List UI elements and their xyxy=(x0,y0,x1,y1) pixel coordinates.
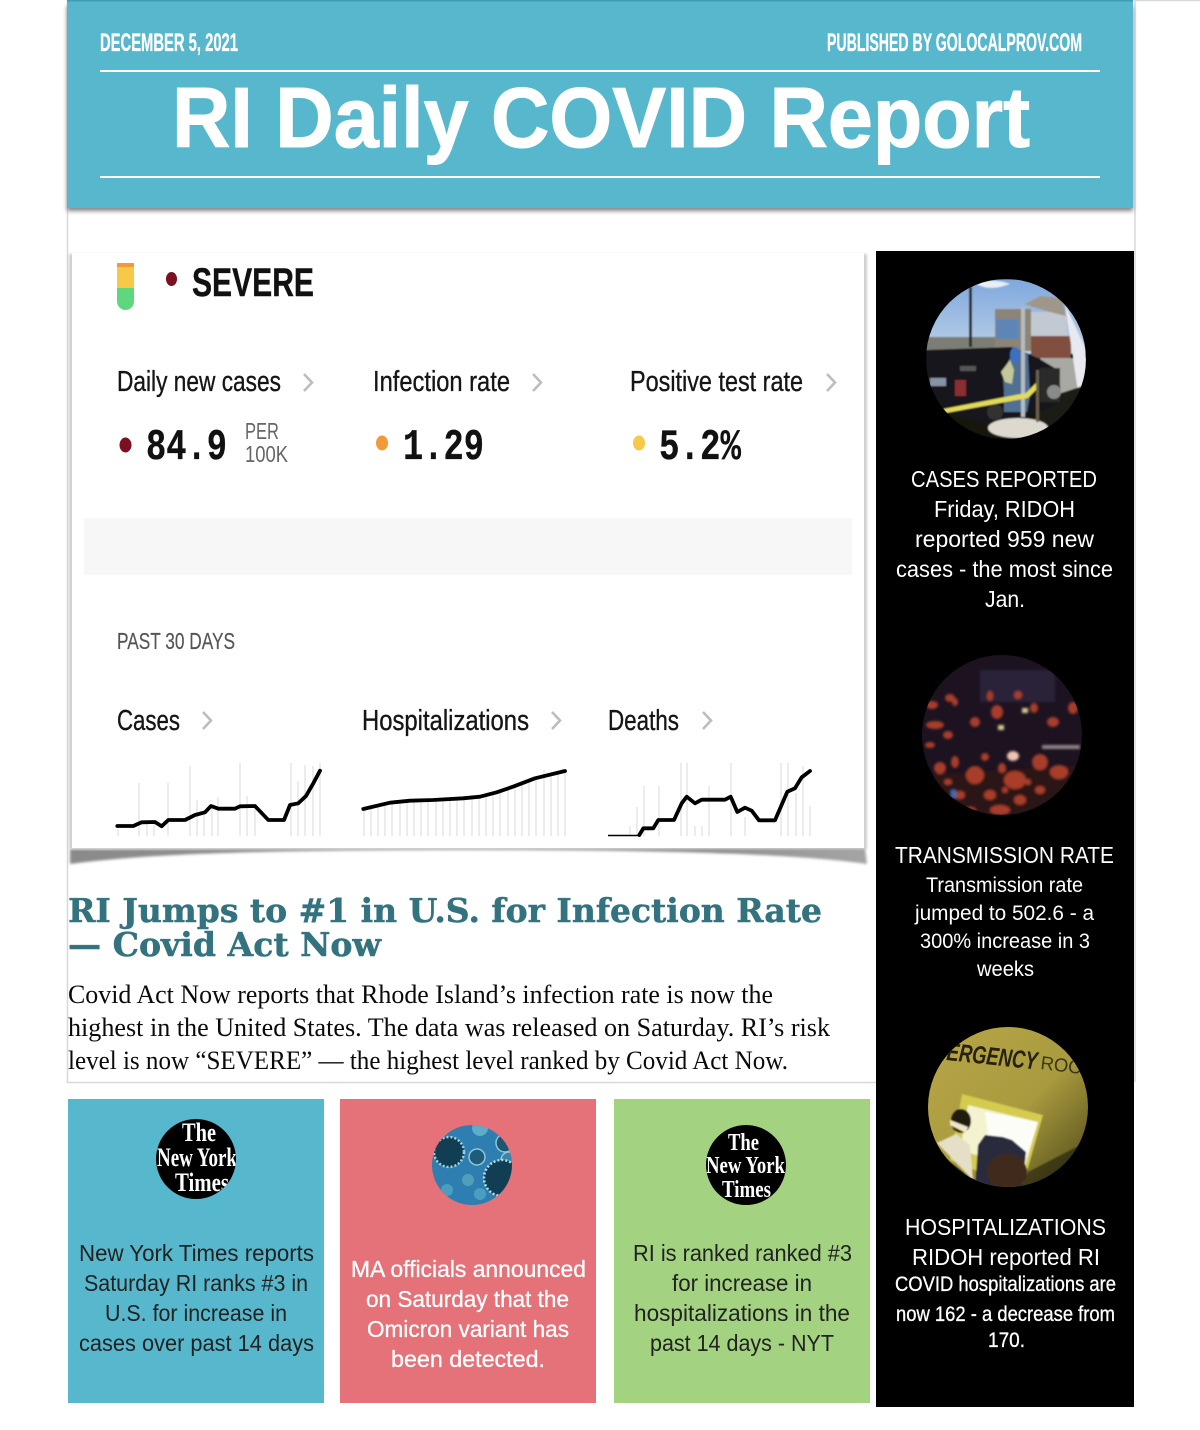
text: transmission rate: jumped to 502.6 - a xyxy=(914,902,1094,925)
photo: emergency room xyxy=(928,1027,1090,1190)
severe status: SEVERE xyxy=(192,261,314,305)
metric: daily new cases: 100K xyxy=(245,441,289,467)
title: RI Daily COVID Report xyxy=(172,71,1030,166)
metric: daily new cases xyxy=(117,366,312,473)
chart: hospitalizations xyxy=(362,705,565,836)
photo: crowd xyxy=(922,655,1082,815)
chart: deaths xyxy=(608,705,810,836)
card: hospitalizations ranking xyxy=(614,1099,870,1403)
text: transmission rate: TRANSMISSION RATE xyxy=(895,842,1114,868)
card text xyxy=(633,1240,852,1356)
card text: Saturday RI ranks #3 in xyxy=(84,1270,308,1296)
text: hospitalizations: HOSPITALIZATIONS xyxy=(905,1214,1106,1240)
metric: daily new cases: Daily new cases xyxy=(117,366,281,398)
grey band xyxy=(84,518,852,575)
risk gauge icon xyxy=(117,263,134,310)
metric: infection rate: 1.29 xyxy=(403,423,484,473)
metric: positive test rate: Positive test rate xyxy=(630,366,803,398)
text: hospitalizations xyxy=(895,1214,1116,1352)
article heading: RI Jumps to #1 in U.S. for Infection Rate xyxy=(68,891,822,930)
icon: NYT logo xyxy=(706,1125,786,1205)
panel: risk level screenshot xyxy=(69,253,867,864)
text: hospitalizations: now 162 - a decrease from xyxy=(896,1303,1115,1326)
card text: past 14 days - NYT xyxy=(650,1330,834,1356)
text: cases reported: Friday, RIDOH xyxy=(934,496,1075,522)
icon: NYT logo: Times xyxy=(722,1177,771,1203)
metric: infection rate: Infection rate xyxy=(373,366,510,398)
card text: MA officials announced xyxy=(351,1256,586,1282)
icon: NYT logo: New York xyxy=(157,1143,237,1172)
card: New York Times cases xyxy=(68,1099,324,1403)
card text xyxy=(351,1256,586,1372)
chart: cases: Cases xyxy=(117,705,180,737)
card text: New York Times reports xyxy=(79,1240,314,1266)
photo: emergency room: ERGENCY xyxy=(945,1038,1040,1076)
article body text xyxy=(68,980,830,1075)
page frame xyxy=(68,0,1200,1082)
chart: cases xyxy=(117,705,320,836)
text: hospitalizations: RIDOH reported RI xyxy=(912,1244,1100,1270)
card text: Omicron variant has xyxy=(367,1316,569,1342)
photo: emergency room: ROO xyxy=(1039,1053,1084,1079)
card text: RI is ranked ranked #3 xyxy=(633,1240,852,1266)
card text xyxy=(79,1240,314,1356)
article body text: Covid Act Now reports that Rhode Island’s infection rate is now the xyxy=(68,980,773,1009)
chart: hospitalizations: Hospitalizations xyxy=(362,705,529,737)
article heading xyxy=(68,891,822,964)
icon: NYT logo: The xyxy=(182,1118,216,1147)
icon: NYT logo: Times xyxy=(175,1168,229,1197)
icon: NYT logo: New York xyxy=(706,1153,786,1179)
card text: hospitalizations in the xyxy=(634,1300,850,1326)
card text: for increase in xyxy=(672,1270,812,1296)
article body text: level is now “SEVERE” — the highest level ranked by Covid Act Now. xyxy=(68,1046,788,1075)
article body text: highest in the United States. The data was released on Saturday. RI’s risk xyxy=(68,1013,830,1042)
metric: positive test rate: 5.2% xyxy=(659,423,741,473)
metric: positive test rate xyxy=(630,366,835,473)
text: transmission rate: 300% increase in 3 xyxy=(920,930,1090,953)
text: cases reported: Jan. xyxy=(985,586,1025,612)
card: Omicron variant xyxy=(340,1099,596,1403)
icon: NYT logo xyxy=(156,1118,237,1199)
header banner xyxy=(67,0,1133,211)
card text: U.S. for increase in xyxy=(105,1300,287,1326)
card text: been detected. xyxy=(391,1346,545,1372)
icon: virus image xyxy=(432,1125,512,1205)
icon: NYT logo: The xyxy=(728,1130,759,1156)
panel: black sidebar xyxy=(876,251,1134,1407)
severe status xyxy=(166,261,314,305)
past 30 days label: PAST 30 DAYS xyxy=(117,628,235,654)
date: DECEMBER 5, 2021 xyxy=(100,29,238,57)
text: hospitalizations: 170. xyxy=(988,1329,1025,1352)
photo: testing site xyxy=(926,279,1090,440)
text: cases reported: cases - the most since xyxy=(896,556,1113,582)
metric: daily new cases: 84.9 xyxy=(146,423,227,473)
metric: daily new cases: PER xyxy=(245,418,279,444)
text: cases reported xyxy=(896,466,1113,612)
text: hospitalizations: COVID hospitalizations are xyxy=(895,1273,1116,1296)
text: transmission rate: weeks xyxy=(976,958,1034,981)
text: cases reported: reported 959 new xyxy=(915,526,1094,552)
text: transmission rate: Transmission rate xyxy=(926,874,1083,897)
text: transmission rate xyxy=(895,842,1114,981)
card text: on Saturday that the xyxy=(366,1286,569,1312)
chart: deaths: Deaths xyxy=(608,705,679,737)
metric: infection rate xyxy=(373,366,541,473)
text: cases reported: CASES REPORTED xyxy=(911,466,1097,492)
card text: cases over past 14 days xyxy=(79,1330,314,1356)
article heading: — Covid Act Now xyxy=(68,925,383,964)
